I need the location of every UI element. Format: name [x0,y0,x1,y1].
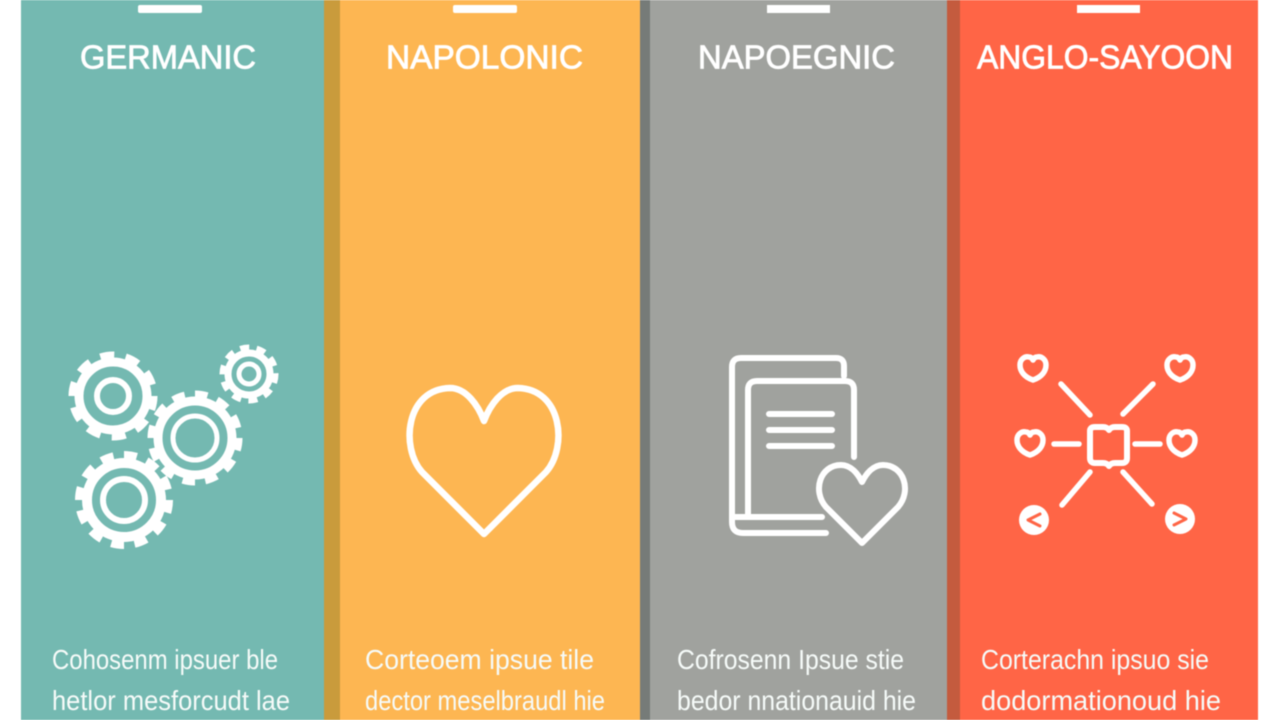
title bar: Germanic [138,5,202,13]
icon: book with heart [732,358,905,543]
text block: Anglo-Saxon: dodormationoud hie [981,685,1221,716]
text block: Germanic: hetlor mesforcudt lae [52,685,290,716]
text block: Napoegnic: bedor nnationauid hie [677,685,916,716]
panel: Anglo-Saxon [947,0,1258,720]
text block: Napoegnic [677,644,916,716]
heading: Napoegnic: NAPOEGNIC [698,38,895,76]
title bar: Napolonic [453,5,517,13]
panel: Germanic [21,0,324,720]
heading: Anglo-Saxon: ANGLO-SAYOON [977,38,1233,76]
text block: Anglo-Saxon: Corterachn ipsuo sie [981,644,1209,675]
text block: Anglo-Saxon [981,644,1221,716]
text block: Napoegnic: Cofrosenn Ipsue stie [677,644,904,675]
panel: Napolonic [324,0,640,720]
icon: heart [410,388,558,534]
panel: Napoegnic [640,0,947,720]
heading: Germanic: GERMANIC [80,38,256,76]
title bar: Anglo-Saxon [1077,5,1140,13]
text block: Germanic [52,644,290,716]
text block: Germanic: Cohosenm ipsuer ble [52,644,278,675]
heading: Napolonic: NAPOLONIC [386,38,583,76]
title bar: Napoegnic [767,5,830,13]
text block: Napolonic: Corteoem ipsue tile [365,644,594,675]
text block: Napolonic [365,644,605,716]
icon: gears [73,348,275,544]
text block: Napolonic: dector meselbraudl hie [365,685,605,716]
icon: network of hearts around a book [1017,357,1195,535]
